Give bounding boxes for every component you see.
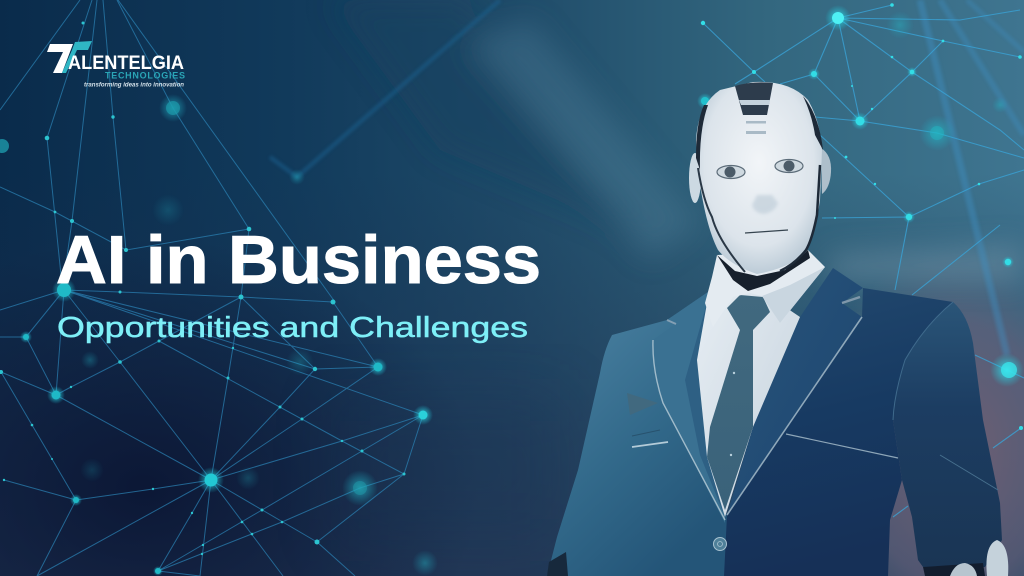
robot neck <box>717 250 810 291</box>
logo wordmark: ALENTELGIA <box>68 52 184 74</box>
network nodes: left <box>0 22 438 576</box>
robot figure <box>547 82 1008 576</box>
logo subtitle: TECHNOLOGIES <box>105 70 185 80</box>
icon: pocket square <box>627 393 658 415</box>
logo tagline: transforming ideas into innovation <box>84 82 184 88</box>
jacket button <box>714 538 726 550</box>
side panels <box>696 96 823 272</box>
shirt collar <box>705 250 825 327</box>
robot eyes <box>717 160 803 178</box>
robotic hand <box>547 540 1008 576</box>
robot head <box>696 82 823 274</box>
network: right <box>703 5 1024 517</box>
tie <box>707 295 770 510</box>
icon: T mark <box>47 41 92 73</box>
robot suit <box>547 268 1002 576</box>
robot ears <box>689 148 831 203</box>
shirt <box>697 290 800 517</box>
title: AI in Business <box>56 222 541 298</box>
logo: Talentelgia Technologies <box>47 41 185 88</box>
network nodes: right <box>697 3 1024 430</box>
network: left <box>0 0 423 576</box>
subtitle: Opportunities and Challenges <box>57 312 528 344</box>
